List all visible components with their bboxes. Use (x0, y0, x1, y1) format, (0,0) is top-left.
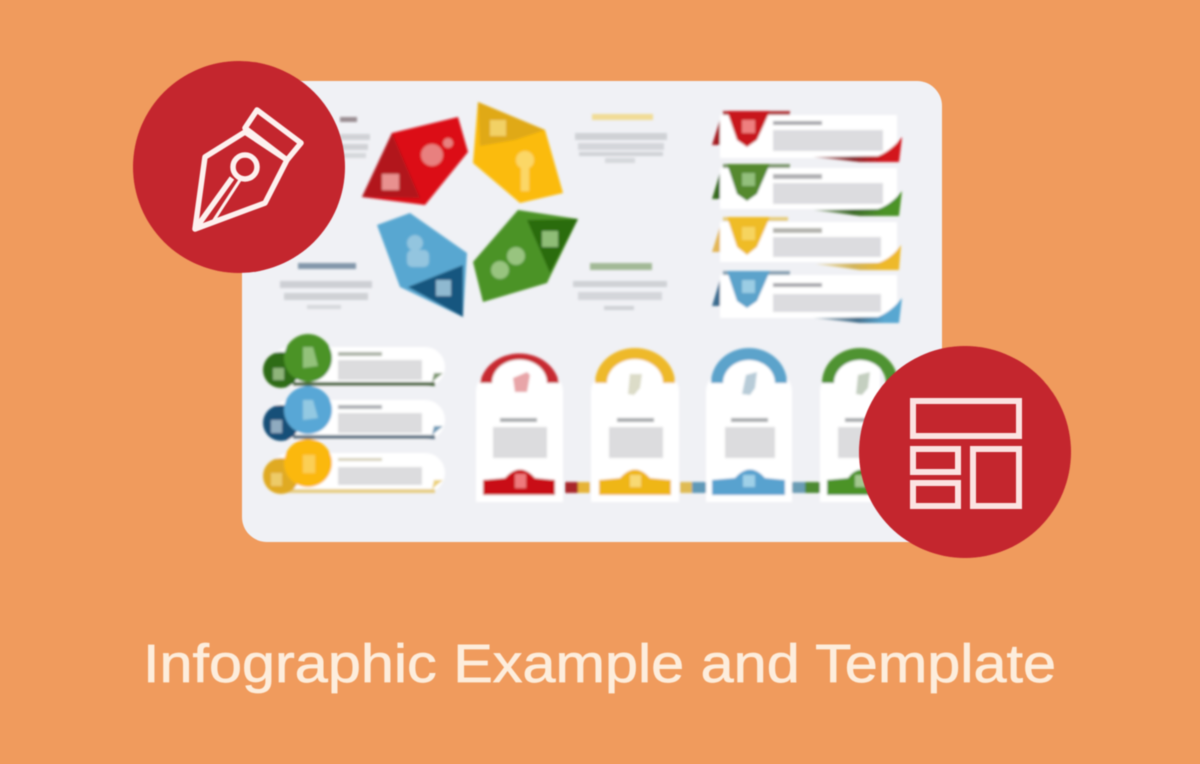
list: ribbon items (712, 111, 902, 323)
connector: yellow to blue (680, 482, 706, 493)
pill item: green (263, 334, 445, 388)
cards: arch columns (476, 348, 898, 502)
card: blue (706, 348, 792, 502)
text block: lower right caption (573, 263, 667, 310)
panel: template preview (242, 81, 942, 542)
card: red (476, 354, 563, 502)
badge: layout icon (859, 346, 1071, 558)
chart: pentagon petal cycle (362, 102, 578, 317)
icon: fountain pen nib (195, 110, 301, 229)
list: pill items (263, 334, 445, 494)
connector: blue to green (792, 482, 820, 493)
text block: top right caption (575, 114, 667, 163)
card: green (820, 348, 898, 502)
petal: yellow (473, 102, 563, 203)
text block: lower left caption (280, 263, 372, 309)
ribbon item: blue (712, 271, 902, 323)
pill item: blue (263, 386, 445, 441)
icon: page layout (913, 401, 1019, 506)
ribbon item: red (712, 111, 902, 162)
ribbon item: yellow (712, 217, 901, 270)
petal: blue (377, 213, 467, 317)
badge: pen tool icon (133, 61, 345, 273)
ribbon item: green (712, 164, 902, 216)
connector: red to yellow (565, 482, 590, 493)
petal: red (362, 117, 468, 205)
title: Infographic Example and Template (143, 634, 1056, 694)
text block: top left caption (340, 117, 370, 158)
petal: green (473, 210, 578, 302)
pill item: yellow (263, 439, 445, 494)
card: yellow (591, 348, 679, 502)
